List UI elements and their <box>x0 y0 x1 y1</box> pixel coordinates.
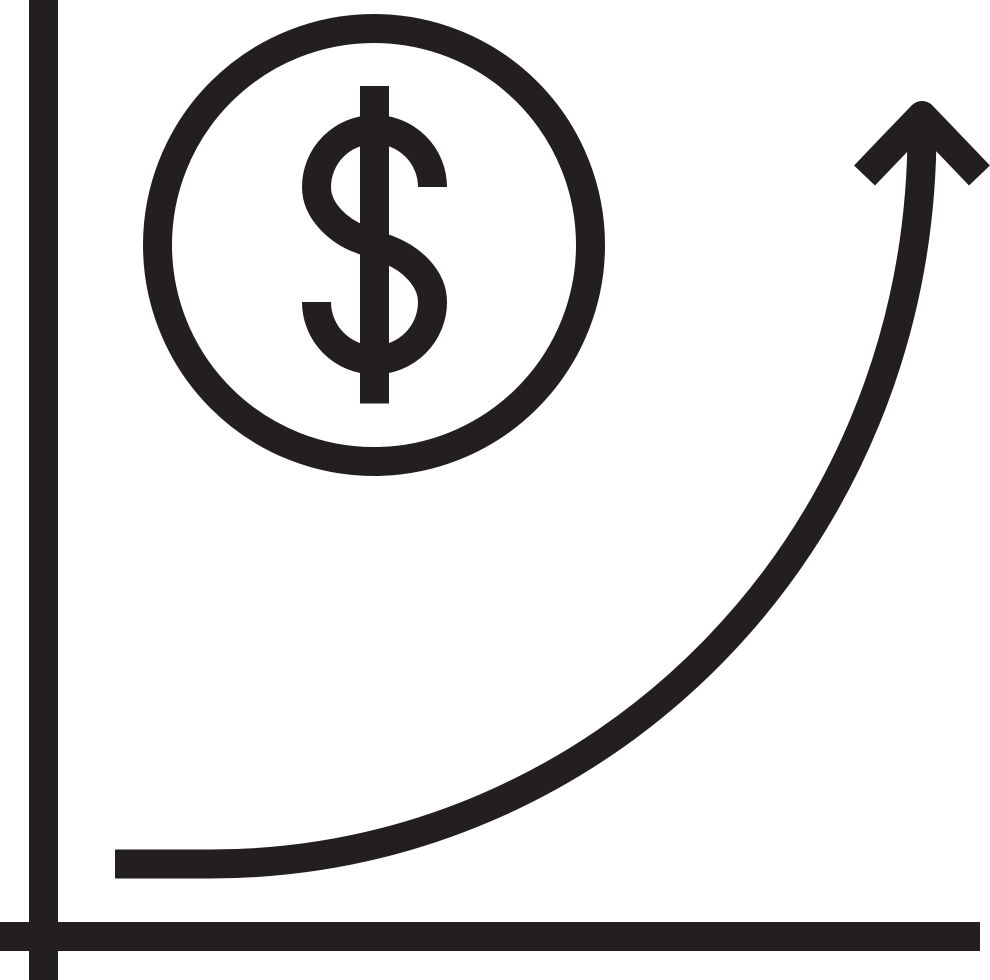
growth curve arrow <box>115 116 980 864</box>
icon: dollar coin <box>158 28 590 462</box>
vertical axis <box>29 0 58 980</box>
horizontal axis <box>0 922 980 951</box>
